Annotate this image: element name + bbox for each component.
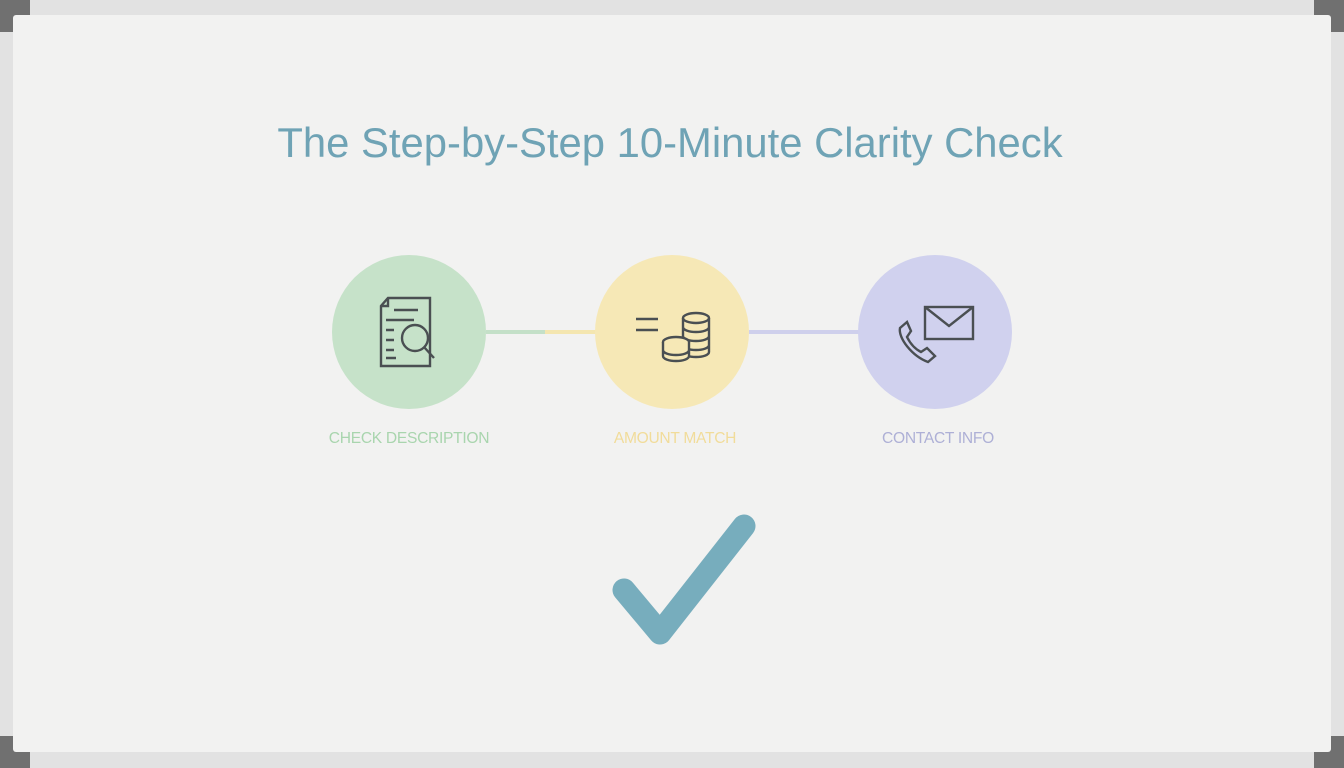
step 2 circle: coins bbox=[595, 255, 749, 409]
connector lines bbox=[486, 330, 859, 334]
label 1: CHECK DESCRIPTION bbox=[329, 430, 489, 447]
step 3 circle: phone and mail bbox=[858, 255, 1012, 409]
step 1 circle: document search bbox=[332, 255, 486, 409]
label 2: AMOUNT MATCH bbox=[614, 430, 736, 447]
label 3: CONTACT INFO bbox=[882, 430, 994, 447]
title: The Step-by-Step 10-Minute Clarity Check bbox=[277, 119, 1063, 166]
